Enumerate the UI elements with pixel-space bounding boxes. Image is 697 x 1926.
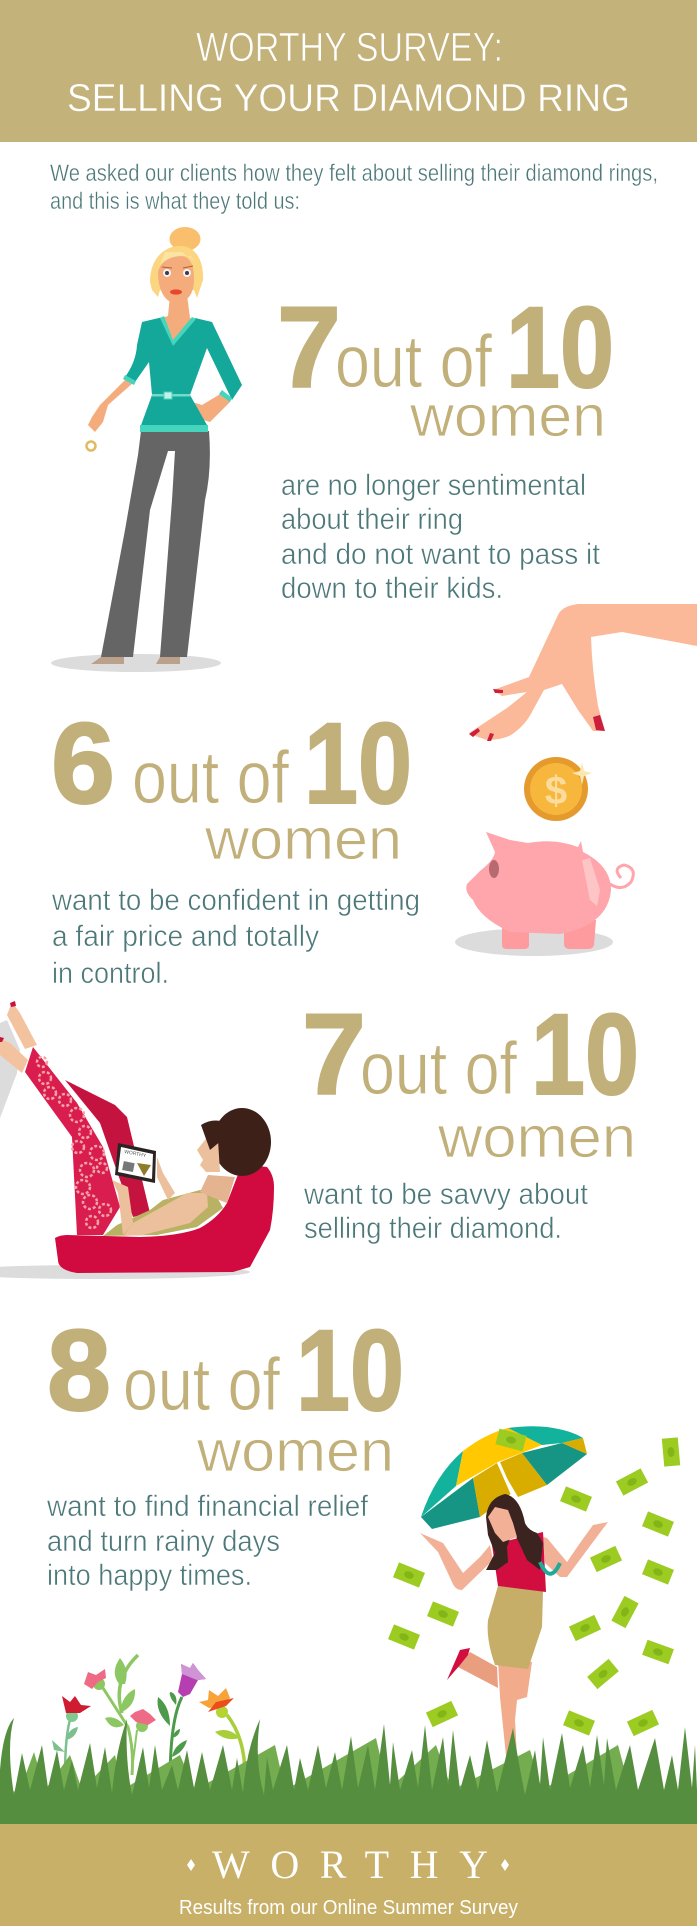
stat: 6 out of 10 women: 6 bbox=[51, 700, 115, 828]
text: financial relief: and turn rainy days bbox=[47, 1525, 280, 1558]
text: fair price: in control. bbox=[52, 957, 169, 990]
umbrella bbox=[421, 1426, 587, 1529]
text: no longer sentimental bbox=[281, 469, 601, 605]
stat: 7 out of 10 women (savvy): 10 bbox=[531, 991, 639, 1119]
illustration: woman reclining with tablet bbox=[0, 1001, 274, 1279]
grass bbox=[0, 1718, 697, 1824]
icon: gold coin: $ bbox=[545, 769, 567, 813]
stat: 7 out of 10 women: women bbox=[409, 384, 606, 449]
stat: 8 out of 10 women: out of bbox=[123, 1343, 280, 1426]
stat: 6 out of 10 women: 10 bbox=[304, 700, 412, 828]
intro text bbox=[50, 160, 658, 215]
logo: WORTHY: WORTHY bbox=[212, 1842, 488, 1887]
text: financial relief bbox=[46, 1490, 369, 1592]
header banner bbox=[0, 0, 697, 142]
illustration: hand bbox=[469, 604, 697, 741]
stat: 7 out of 10 women: 7 bbox=[277, 284, 341, 412]
stat: 7 out of 10 women (savvy): 7 bbox=[302, 991, 366, 1119]
stat: 8 out of 10 women: women bbox=[196, 1419, 394, 1484]
text: fair price: want to be confident in getting bbox=[51, 884, 420, 917]
stat: 6 out of 10 women: out of bbox=[132, 736, 289, 819]
stat: 7 out of 10 women (savvy) bbox=[302, 991, 639, 1170]
stat: 7 out of 10 women (savvy): women bbox=[437, 1105, 636, 1170]
text: no longer sentimental: down to their kids. bbox=[281, 572, 503, 605]
stat: 8 out of 10 women bbox=[47, 1307, 404, 1484]
text: no longer sentimental: and do not want to pass it bbox=[281, 538, 601, 571]
illustration: woman dropping ring bbox=[51, 227, 242, 672]
icon: gold coin bbox=[524, 757, 592, 821]
intro text: and this is what they told us: bbox=[50, 188, 300, 215]
illustration: piggy bank bbox=[455, 832, 633, 956]
illustration: woman with umbrella bbox=[420, 1426, 608, 1775]
illustration: flowers bbox=[52, 1655, 245, 1783]
text: savvy: want to be savvy about bbox=[303, 1178, 589, 1211]
footer banner bbox=[0, 1824, 697, 1926]
text: fair price bbox=[51, 884, 420, 990]
text: no longer sentimental: are no longer sentimental bbox=[281, 469, 586, 502]
text: financial relief: want to find financial relief bbox=[46, 1490, 369, 1523]
icon: falling banknotes bbox=[388, 1429, 680, 1736]
title: SELLING YOUR DIAMOND RING bbox=[67, 77, 630, 120]
icon: tablet: WORTHY bbox=[124, 1149, 147, 1159]
stat: 7 out of 10 women: out of bbox=[335, 320, 492, 403]
stat: 6 out of 10 women: women bbox=[204, 807, 402, 872]
footer caption: Results from our Online Summer Survey bbox=[179, 1897, 518, 1919]
text: savvy: selling their diamond. bbox=[304, 1212, 562, 1245]
icon: tablet bbox=[115, 1143, 156, 1183]
text: savvy bbox=[303, 1178, 589, 1245]
stat: 7 out of 10 women (savvy): out of bbox=[360, 1027, 517, 1110]
stat: 7 out of 10 women: 10 bbox=[506, 284, 614, 412]
stat: 7 out of 10 women bbox=[277, 284, 614, 449]
text: no longer sentimental: about their ring bbox=[281, 503, 463, 536]
title bbox=[67, 24, 630, 120]
stat: 8 out of 10 women: 10 bbox=[296, 1307, 404, 1435]
stat: 6 out of 10 women bbox=[51, 700, 412, 872]
stat: 8 out of 10 women: 8 bbox=[47, 1307, 111, 1435]
title: WORTHY SURVEY: bbox=[196, 24, 503, 70]
text: financial relief: into happy times. bbox=[47, 1559, 252, 1592]
text: fair price: a fair price and totally bbox=[52, 920, 319, 953]
